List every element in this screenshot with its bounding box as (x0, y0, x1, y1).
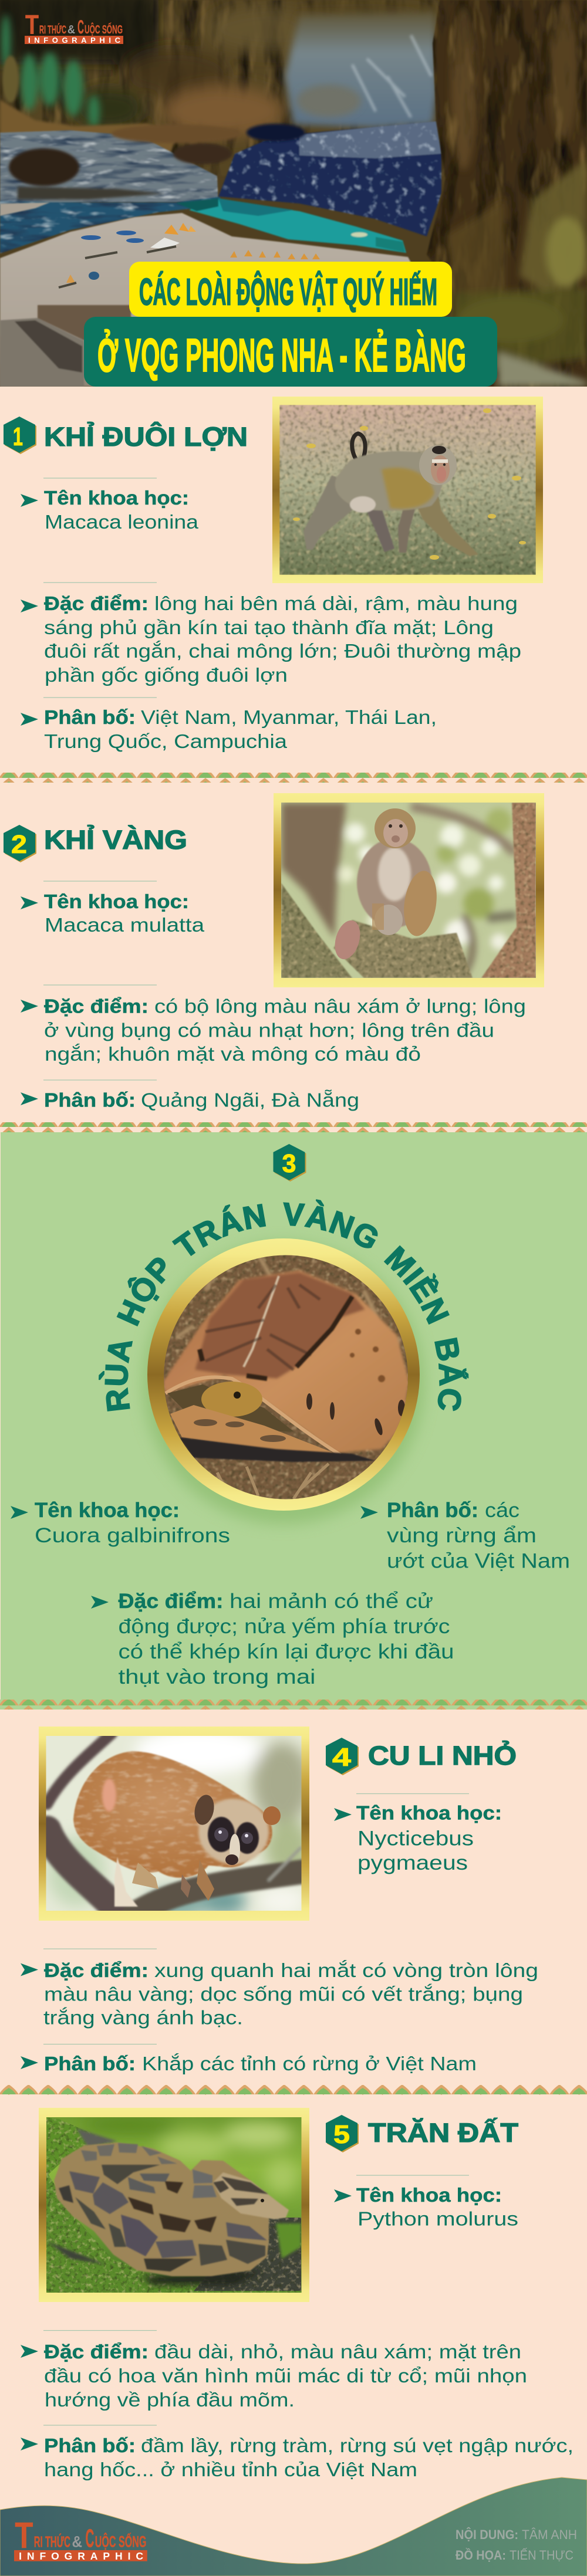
title box: yellow line (129, 262, 452, 317)
scientific name block: Tên khoa học: (356, 2184, 502, 2206)
characteristics block: Đặc điểm: (44, 2341, 149, 2362)
number badge 4 (326, 1738, 359, 1775)
scientific name block: Macaca leonina (45, 511, 199, 533)
number badge 3: 3 (282, 1149, 296, 1178)
heading: CU LI NHỎ (368, 1741, 517, 1771)
credits (456, 2527, 577, 2563)
scientific name block (334, 1802, 502, 1874)
curved heading: RÙA HỘP TRÁN VÀNG MIỀN BẮC (99, 1199, 468, 1411)
number badge 3 (274, 1144, 306, 1182)
scientific name block: Tên khoa học: (44, 891, 189, 912)
logo: Tri thức & Cuộc sống Infographic: & (72, 2533, 82, 2551)
logo: Tri thức & Cuộc sống Infographic: RI THỨC (34, 2533, 70, 2551)
characteristics block: ở vùng bụng có màu nhạt hơn; lông trên đầu (44, 1020, 494, 1041)
scientific name block: Python molurus (357, 2208, 518, 2229)
scientific name block: Tên khoa học: (44, 487, 189, 509)
distribution block: hang hốc... ở nhiều tỉnh của Việt Nam (44, 2459, 417, 2480)
distribution block: đầm lầy, rừng tràm, rừng sú vẹt ngập nước, (141, 2435, 573, 2456)
footer (0, 2477, 587, 2576)
scientific name block (334, 2184, 518, 2229)
panel: 3 Rùa hộp trán vàng miền Bắc (0, 1132, 587, 1710)
characteristics block: thụt vào trong mai (119, 1666, 316, 1688)
logo: Tri thức & Cuộc sống Infographic: T (15, 2516, 33, 2556)
characteristics block: Đặc điểm: (44, 593, 149, 614)
logo: Tri thức & Cuộc sống Infographic: RI THỨC (39, 23, 66, 36)
characteristics block: động được; nửa yếm phía trước (119, 1615, 450, 1638)
scientific name block (21, 891, 205, 936)
scientific name block: Cuora galbinifrons (35, 1524, 230, 1547)
characteristics block (21, 1959, 538, 2029)
distribution block: Việt Nam, Myanmar, Thái Lan, (141, 706, 437, 728)
number badge 1: 1 (13, 422, 23, 451)
characteristics block: phần gốc giống đuôi lợn (45, 664, 288, 686)
characteristics block: lông hai bên má dài, rậm, màu hung (154, 593, 518, 614)
panel: 2 Khỉ vàng (4, 793, 544, 1111)
distribution block: Phân bố: (44, 2053, 136, 2074)
logo: Tri thức & Cuộc sống Infographic: UỘC SỐNG (95, 2532, 146, 2551)
panel: 4 Cu li nhỏ (21, 1727, 538, 2074)
number badge 5: 5 (333, 2120, 350, 2149)
distribution block (21, 2053, 477, 2074)
turtle photo in gold ring (143, 1238, 424, 1524)
number badge 1 (4, 417, 36, 454)
distribution block: Phân bố: (44, 706, 136, 728)
scientific name block: Nycticebus (357, 1827, 474, 1850)
distribution block: các (485, 1499, 519, 1522)
characteristics block: ngắn; khuôn mặt và mông có màu đỏ (45, 1043, 421, 1065)
characteristics block: hai mảnh có thể cử (230, 1590, 433, 1613)
characteristics block (21, 2341, 527, 2411)
number badge 5 (326, 2115, 359, 2152)
logo: Tri thức & Cuộc sống Infographic: & (68, 23, 75, 36)
distribution block: Khắp các tỉnh có rừng ở Việt Nam (142, 2053, 477, 2074)
scientific name block (11, 1499, 230, 1547)
characteristics block: sáng phủ gần kín tai tạo thành đĩa mặt; Lông (44, 617, 494, 638)
heading: TRĂN ĐẤT (368, 2118, 518, 2148)
number badge 4: 4 (332, 1743, 352, 1772)
characteristics block: đuôi rất ngắn, chai mông lớn; Đuôi thường mập (44, 640, 521, 662)
heading: KHỈ VÀNG (44, 825, 187, 855)
logo: Tri thức & Cuộc sống Infographic: INFOGRAPHIC (19, 2550, 143, 2562)
distribution block: Phân bố: (44, 2435, 136, 2456)
credits: ĐỒ HỌA: (456, 2548, 506, 2563)
characteristics block: trắng vàng ánh bạc. (43, 2006, 243, 2029)
distribution block (21, 2435, 573, 2480)
credits: NỘI DUNG: (456, 2527, 518, 2542)
characteristics block: Đặc điểm: (44, 995, 149, 1017)
photo: rhesus macaque on a branch (274, 793, 544, 987)
distribution block: Phân bố: (387, 1499, 478, 1522)
logo: Tri thức & Cuộc sống Infographic: INFOGRAPHIC (28, 36, 121, 45)
characteristics block: Đặc điểm: (44, 1959, 149, 1981)
scientific name block: Macaca mulatta (45, 914, 205, 936)
heading: KHỈ ĐUÔI LỢN (44, 422, 248, 452)
characteristics block: có bộ lông màu nâu xám ở lưng; lông (154, 995, 526, 1017)
title box: green line (84, 317, 497, 387)
characteristics block (21, 593, 521, 686)
distribution block (21, 1089, 359, 1111)
distribution block: Quảng Ngãi, Đà Nẵng (141, 1089, 359, 1111)
characteristics block: đầu dài, nhỏ, màu nâu xám; mặt trên (154, 2341, 521, 2362)
panel: 1 Khỉ đuôi lợn (4, 397, 543, 752)
characteristics block (91, 1590, 454, 1688)
photo: pygmy slow loris (39, 1727, 311, 1921)
logo: Tri thức & Cuộc sống Infographic: T (25, 9, 39, 40)
characteristics block (21, 995, 526, 1065)
number badge 2 (4, 825, 36, 862)
credits: TÂM ANH (522, 2527, 577, 2542)
photo: Burmese python (39, 2108, 309, 2302)
logo: Tri thức & Cuộc sống Infographic: C (86, 2525, 94, 2553)
footer wave (0, 2477, 587, 2576)
panel: hero cave photo with title (0, 0, 587, 387)
logo: Tri thức & Cuộc sống Infographic (25, 9, 123, 45)
distribution block: Trung Quốc, Campuchia (44, 730, 288, 752)
characteristics block: hướng về phía đầu mõm. (45, 2389, 295, 2411)
characteristics block: có thể khép kín lại được khi đầu (119, 1640, 454, 1663)
panel: 5 Trăn đất (21, 2108, 573, 2480)
characteristics block: xung quanh hai mắt có vòng tròn lông (154, 1959, 538, 1981)
number badge 2: 2 (11, 830, 27, 859)
scientific name block: Tên khoa học: (35, 1499, 180, 1522)
credits: TIẾN THỰC (510, 2548, 573, 2563)
distribution block: vùng rừng ẩm (387, 1524, 537, 1547)
characteristics block: Đặc điểm: (119, 1590, 223, 1613)
scientific name block: pygmaeus (357, 1851, 468, 1874)
scientific name block (21, 487, 199, 533)
characteristics block: màu nâu vàng; dọc sống mũi có vết trắng; bụng (44, 1983, 523, 2005)
logo: Tri thức & Cuộc sống Infographic: C (77, 16, 84, 38)
distribution block (360, 1499, 570, 1572)
photo: pig-tailed macaque (272, 397, 543, 583)
logo: Tri thức & Cuộc sống Infographic: UỘC SỐNG (85, 22, 123, 36)
distribution block: Phân bố: (44, 1089, 136, 1111)
characteristics block: đầu có hoa văn hình mũi mác di từ cổ; mũi nhọn (44, 2365, 527, 2387)
photo: Phong Nha cave interior (0, 0, 587, 387)
scientific name block: Tên khoa học: (356, 1802, 502, 1823)
distribution block: ướt của Việt Nam (387, 1550, 570, 1572)
logo: Tri thức & Cuộc sống Infographic (14, 2516, 147, 2562)
distribution block (21, 706, 437, 752)
